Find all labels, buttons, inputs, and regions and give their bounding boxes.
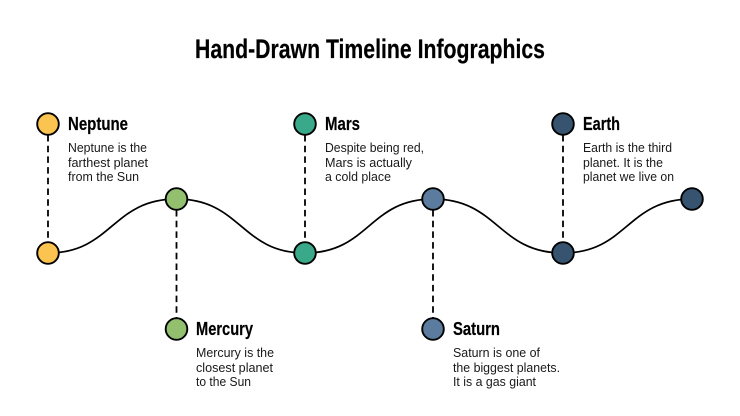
text: Neptune description: Neptune is the (68, 140, 147, 155)
dot: Neptune top (37, 113, 59, 135)
dot: Mars top (294, 113, 316, 135)
dot: Earth top (552, 113, 574, 135)
text: Earth description (583, 140, 674, 184)
milestone: Neptune (37, 113, 148, 264)
milestone: Mercury (166, 188, 274, 389)
milestone: Earth (552, 113, 674, 264)
text: Neptune description: farthest planet (68, 155, 148, 170)
text: Mars description (325, 140, 424, 184)
dot: Saturn on curve (422, 188, 444, 210)
dot: Earth on curve (552, 242, 574, 264)
dashed connector: Earth (562, 135, 564, 242)
dot: Neptune on curve (37, 242, 59, 264)
text: Saturn description: the biggest planets. (453, 360, 560, 375)
title: Hand-Drawn Timeline Infographics (195, 34, 545, 64)
dashed connector: Mercury (176, 210, 178, 318)
milestone: Mars (294, 113, 424, 264)
text: Mercury description (196, 345, 274, 389)
text: Mercury description: to the Sun (196, 374, 251, 389)
dashed connector: Saturn (432, 210, 434, 318)
heading: Saturn: Saturn (453, 318, 500, 339)
text: Earth description: Earth is the third (583, 140, 672, 155)
text: Earth description: planet we live on (583, 169, 674, 184)
dot: Saturn bottom (422, 318, 444, 340)
heading: Mercury: Mercury (196, 318, 254, 339)
dot: Mars on curve (294, 242, 316, 264)
heading: Earth: Earth (583, 113, 620, 134)
dashed connector: Mars (304, 135, 306, 242)
text: Saturn description: Saturn is one of (453, 345, 540, 360)
text: Mars description: Despite being red, (325, 140, 424, 155)
text: Mercury description: Mercury is the (196, 345, 274, 360)
dot: Mercury bottom (166, 318, 187, 340)
dot: timeline end (681, 188, 703, 210)
dashed connector: Neptune (47, 135, 49, 242)
heading: Mars: Mars (325, 113, 360, 134)
text: Earth description: planet. It is the (583, 155, 663, 170)
text: Mercury description: closest planet (196, 360, 273, 375)
milestone: Saturn (422, 188, 560, 389)
text: Neptune description (68, 140, 148, 184)
text: Mars description: a cold place (325, 169, 391, 184)
heading: Neptune: Neptune (68, 113, 128, 134)
text: Neptune description: from the Sun (68, 169, 139, 184)
text: Saturn description: It is a gas giant (453, 374, 536, 389)
timeline curve (48, 199, 692, 253)
dot: Mercury on curve (166, 188, 187, 210)
text: Mars description: Mars is actually (325, 155, 412, 170)
text: Saturn description (453, 345, 560, 389)
